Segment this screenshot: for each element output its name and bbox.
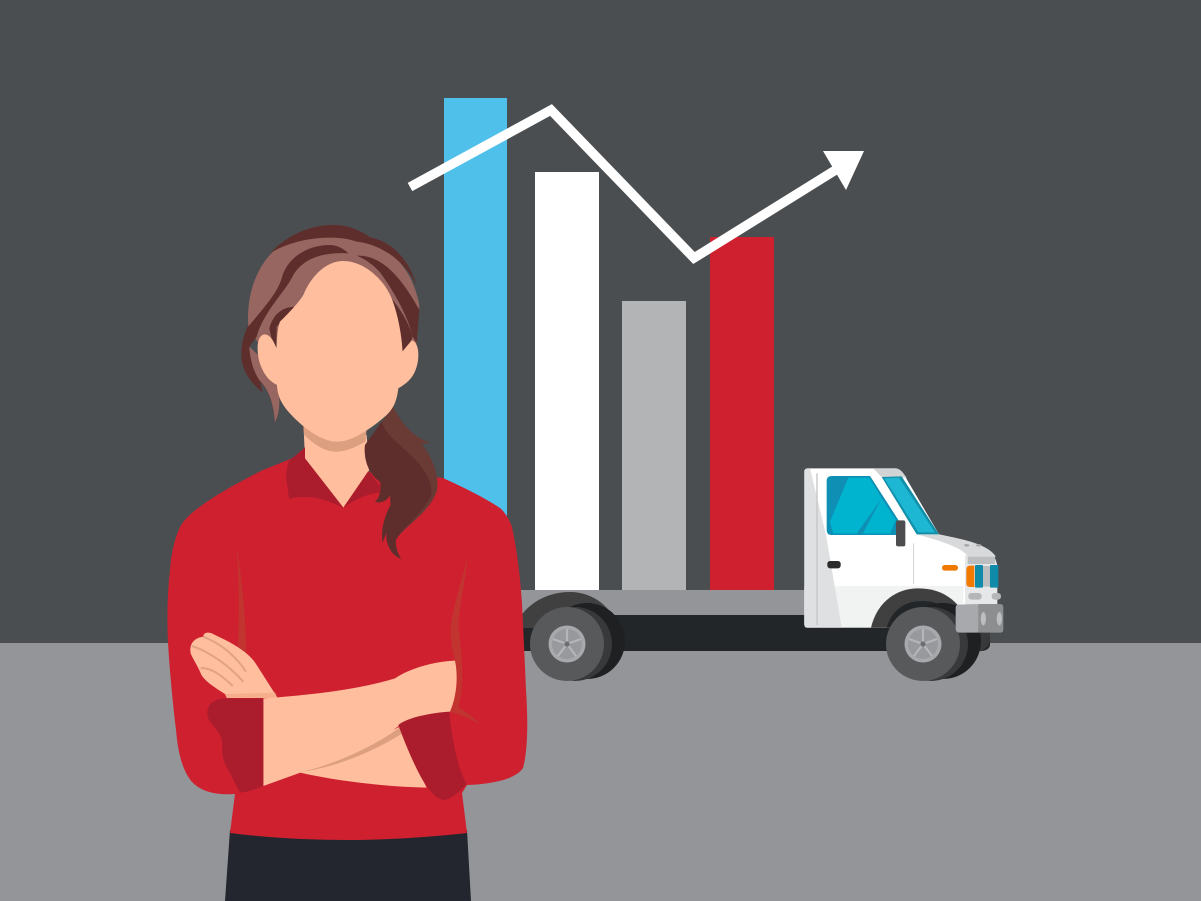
nose panel (965, 555, 997, 605)
orange marker light (942, 565, 958, 571)
blue headlight left (975, 565, 983, 588)
skirt (225, 830, 471, 901)
truck bed (515, 590, 807, 616)
front wheel (886, 603, 981, 681)
blue headlight right (990, 565, 998, 588)
background wall (0, 0, 1201, 643)
grille top (968, 557, 995, 564)
hood edge (917, 534, 996, 557)
hair right lock (390, 297, 413, 363)
front wheel arch (871, 588, 961, 628)
fog lights (968, 593, 982, 600)
ponytail (365, 407, 438, 559)
hair top shadow (270, 225, 417, 286)
door window pane (830, 478, 882, 534)
truck (515, 468, 1003, 681)
face (276, 261, 403, 442)
ground (0, 643, 1201, 901)
roof (873, 468, 907, 478)
left ear (258, 334, 280, 385)
collar right (343, 471, 385, 508)
truck chassis (515, 615, 990, 651)
sleeve fold left (236, 544, 246, 653)
lower bumper shadow (957, 632, 990, 651)
cuff left (207, 698, 263, 793)
upper body details (241, 225, 438, 559)
cuff right (398, 712, 467, 800)
trend arrow (410, 110, 864, 258)
arms (190, 544, 479, 800)
bar: white (535, 172, 599, 590)
door seam (913, 543, 914, 584)
panel seam (816, 473, 818, 625)
sweater (167, 458, 527, 840)
cab rear panel (804, 468, 842, 628)
sleeve fold right (449, 553, 479, 724)
rear wheel (530, 603, 625, 681)
cab body (804, 468, 997, 628)
finger lines (192, 637, 246, 686)
door window (827, 476, 898, 535)
upper forearm (263, 661, 457, 786)
hood vents (964, 544, 969, 547)
hair left inner lock (249, 347, 279, 422)
orange headlight (966, 566, 974, 587)
lower body band (804, 586, 963, 628)
rear wheel arch (515, 592, 619, 628)
neck shadow (303, 425, 367, 452)
hand (190, 633, 277, 697)
bar chart (444, 98, 774, 590)
hair forehead lock (269, 307, 296, 359)
woman with crossed arms (167, 225, 527, 901)
grille slats (983, 566, 990, 587)
lower forearm (300, 727, 427, 788)
bar: blue (444, 98, 507, 538)
ponytail shadow (365, 422, 432, 559)
wrist shade (225, 693, 277, 698)
windshield (882, 476, 939, 534)
truck cab (804, 468, 1001, 651)
hair strand (248, 245, 348, 347)
hair right strand (357, 256, 419, 343)
bar: red (710, 237, 774, 590)
right ear (397, 340, 418, 388)
neck (303, 422, 369, 508)
bar: grey (622, 301, 686, 590)
forearm shadow (303, 727, 401, 772)
collar left (286, 447, 343, 508)
door handle (827, 561, 841, 568)
bumper (956, 604, 1003, 633)
hair back (248, 235, 419, 382)
mirror (896, 520, 905, 546)
hair left outer (241, 325, 279, 422)
